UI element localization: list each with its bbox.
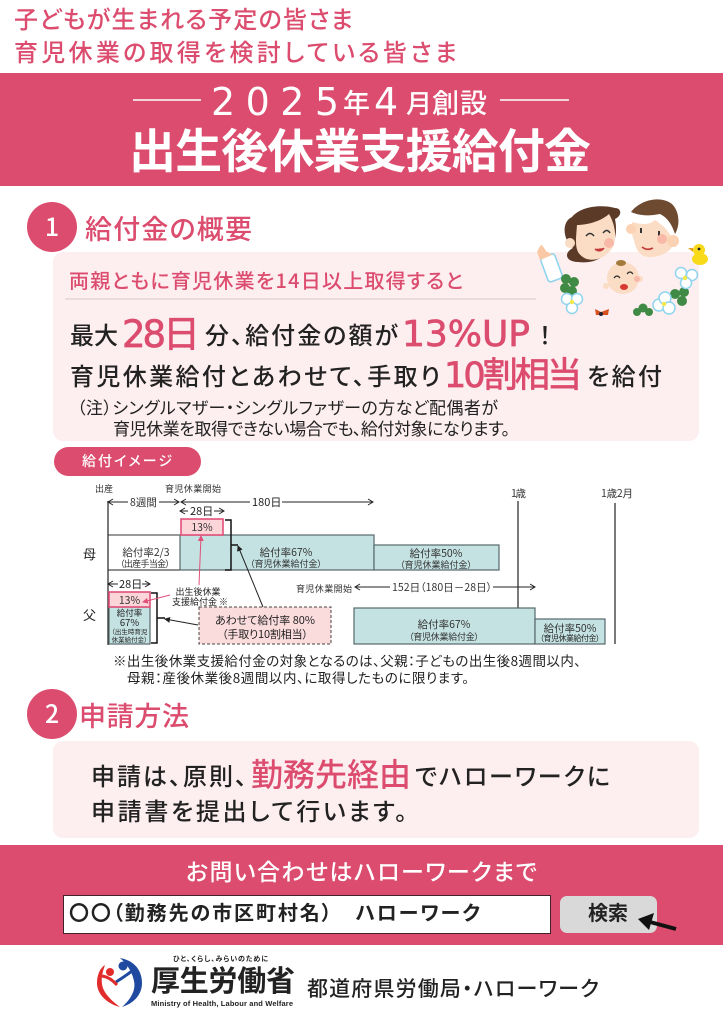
father bars: （出生時育児: [112, 626, 148, 636]
icon: clovers and flowers: [560, 268, 698, 316]
panel: application method: でハローワークに: [415, 757, 610, 792]
search button: 検索: [588, 897, 628, 926]
panel: overview background: [53, 252, 699, 441]
timeline axis labels: 育児休業開始: [165, 482, 221, 495]
chart footnote: ※出生後休業支援給付金の対象となるのは、父親：子どもの出生後8週間以内、: [113, 650, 581, 670]
lead sentence: 両親ともに育児休業を14日以上取得すると: [69, 265, 463, 294]
benefit line one: 最大: [70, 316, 118, 351]
duration arrows: 8週間: [130, 495, 157, 510]
mother bars: 母: [83, 544, 96, 563]
callout: new benefit pink label: 支援給付金 ※: [172, 595, 228, 608]
title banner: 創設: [432, 82, 487, 121]
title banner: 月: [406, 84, 432, 121]
ministry name: Ministry of Health, Labour and Welfare: [151, 999, 293, 1008]
note: 育児休業を取得できない場合でも、給付対象になります。: [113, 415, 510, 440]
illustration: family: [537, 199, 708, 316]
icon: baby: [603, 260, 643, 294]
icon: ministry emblem: [97, 958, 142, 1007]
father bars: 給付率67%: [418, 617, 471, 632]
mother bars: （育児休業給付金）: [250, 557, 322, 570]
panel: overview text: [65, 265, 662, 440]
father bars: [83, 592, 605, 644]
mother bars: 給付率67%: [260, 545, 313, 560]
contact band: お問い合わせはハローワークまで: [186, 853, 537, 887]
panel: application method: 勤務先経由: [251, 750, 411, 796]
audience heading: 子どもが生まれる予定の皆さま: [14, 0, 353, 35]
mother bars: [83, 519, 499, 571]
benefit line two: [70, 356, 662, 396]
benefit line one: 28日: [122, 313, 200, 356]
section 2 heading: 2: [45, 695, 59, 731]
benefit line two: 育児休業給付とあわせて、手取り: [70, 357, 440, 392]
father bars: 休業給付金）: [112, 634, 147, 644]
ministry name: 厚生労働省: [151, 958, 295, 1000]
father bars: 給付率: [117, 607, 143, 619]
benefit line two: を給付: [587, 357, 662, 392]
callout: new benefit pink label: 出生後休業: [175, 585, 221, 598]
search button: [560, 896, 657, 933]
timeline axis labels: 1歳2月: [601, 486, 633, 501]
title banner: 出生後休業支援給付金: [129, 113, 591, 182]
title banner: [0, 73, 723, 186]
duration arrows: [108, 494, 535, 595]
timeline axis labels: 出産: [95, 482, 113, 495]
father bars: 給付率50%: [544, 621, 597, 636]
contact band: [0, 845, 723, 945]
father bars: 13%: [119, 593, 140, 608]
arrow: pointer to search: [638, 913, 676, 930]
icon: mother: [565, 206, 620, 262]
duration arrows: 育児休業開始: [296, 582, 352, 595]
title banner: 年: [343, 82, 370, 121]
audience heading: [14, 0, 457, 68]
callout: combined rate 80%: [165, 546, 331, 644]
section 2 heading: 申請方法: [79, 695, 189, 734]
duration arrows: 180日: [252, 494, 281, 510]
icon: father: [626, 199, 679, 257]
father bars: 父: [83, 605, 96, 624]
note: （注）シングルマザー・シングルファザーの方など配偶者が: [77, 394, 498, 419]
father bars: 67%: [120, 615, 139, 629]
duration arrows: 152日（180日－28日）: [392, 580, 492, 595]
section 1 heading: [27, 202, 252, 252]
chart: benefit timeline: [83, 482, 633, 645]
bureau name: 都道府県労働局・ハローワーク: [307, 973, 599, 1003]
search box: 〇〇（勤務先の市区町村名） ハローワーク: [69, 897, 480, 926]
search box: [64, 896, 550, 934]
title banner: 4: [374, 80, 398, 124]
footer: ministry logo: [97, 954, 599, 1008]
chart footnote: [113, 650, 581, 687]
timeline axis labels: [95, 482, 633, 645]
panel: application method: 申請は、原則、: [91, 757, 247, 792]
benefit image label: [54, 447, 201, 476]
section 2 heading: [27, 689, 189, 739]
benefit line two: 10割相当: [444, 356, 582, 396]
benefit line one: 13%UP: [402, 314, 530, 355]
callout: combined rate 80%: （手取り10割相当）: [222, 626, 308, 642]
callout: new benefit pink label: [143, 536, 228, 608]
section 1 heading: 1: [45, 208, 59, 244]
icon: baby bottle: [537, 245, 563, 283]
icon: duck: [688, 244, 708, 265]
callout: combined rate 80%: あわせて給付率 80%: [215, 612, 315, 628]
benefit line one: ！: [539, 316, 551, 351]
title banner: 2025: [211, 80, 339, 124]
duration arrows: 28日: [119, 576, 142, 592]
panel: application method: 申請書を提出して行います。: [91, 792, 407, 827]
mother bars: 給付率2/3: [122, 545, 170, 560]
timeline axis labels: 1歳: [511, 486, 526, 501]
mother bars: （出産手当金）: [120, 557, 170, 570]
mother bars: 13%: [191, 520, 213, 535]
benefit image label: 給付イメージ: [82, 451, 172, 471]
section 1 heading: 給付金の概要: [85, 208, 252, 247]
father bars: （育児休業給付金）: [540, 633, 600, 644]
duration arrows: 28日: [190, 503, 213, 519]
father bars: （育児休業給付金）: [409, 630, 479, 643]
note: [77, 394, 510, 440]
chart footnote: 母親：産後休業後8週間以内、に取得したものに限ります。: [127, 667, 469, 687]
benefit line one: [70, 313, 551, 356]
mother bars: （育児休業給付金）: [400, 558, 472, 571]
audience heading: 育児休業の取得を検討している皆さま: [14, 33, 457, 68]
panel: application method: [53, 741, 699, 838]
ministry name: ひと、くらし、みらいのために: [173, 954, 268, 964]
benefit line one: 分、給付金の額が: [205, 316, 398, 351]
mother bars: 給付率50%: [410, 546, 463, 561]
